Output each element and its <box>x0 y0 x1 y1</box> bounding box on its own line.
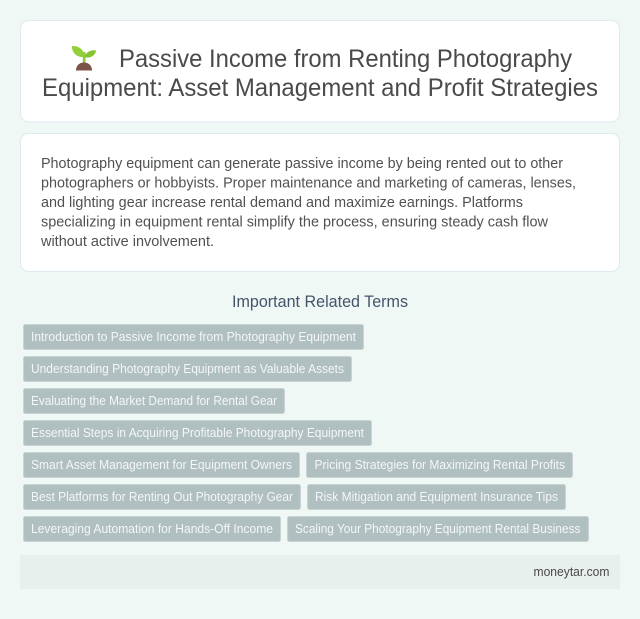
text block: description: without active involvement. <box>40 234 214 250</box>
footer bar <box>20 555 620 589</box>
text block: description: Photography equipment can generate passive income by being rented out to other <box>41 156 563 172</box>
tag: Introduction to Passive Income from Photography Equipment <box>31 330 356 344</box>
tag: Pricing Strategies for Maximizing Rental Profits <box>314 458 565 472</box>
tag <box>24 356 352 382</box>
footer source text: moneytar.com <box>534 565 610 579</box>
tag: Essential Steps in Acquiring Profitable Photography Equipment <box>31 426 364 440</box>
panel: description card <box>20 134 620 272</box>
tag <box>24 452 300 478</box>
tag <box>24 516 280 542</box>
text block: description <box>40 156 576 250</box>
text block: description: and lighting gear increase rental demand and maximize earnings. Platforms <box>41 195 523 211</box>
title: Equipment: Asset Management and Profit Strategies <box>42 74 598 102</box>
tag <box>24 324 364 350</box>
heading: important related terms: Important Related Terms <box>232 293 408 311</box>
tag <box>24 484 300 510</box>
icon: seedling <box>72 46 96 70</box>
tag <box>308 484 566 510</box>
tag: Scaling Your Photography Equipment Rental Business <box>295 522 580 536</box>
tag: Best Platforms for Renting Out Photography Gear <box>31 490 293 504</box>
tag: Smart Asset Management for Equipment Owners <box>31 458 292 472</box>
title <box>42 45 598 102</box>
text block: description: specializing in equipment rental simplify the process, ensuring steady cash flow <box>41 214 549 230</box>
text block: description: photographers or hobbyists. Proper maintenance and marketing of cameras, lenses, <box>41 176 576 192</box>
tag: Understanding Photography Equipment as Valuable Assets <box>31 362 344 376</box>
title: Passive Income from Renting Photography <box>119 45 572 73</box>
tag <box>288 516 588 542</box>
tag: Evaluating the Market Demand for Rental Gear <box>31 394 277 408</box>
panel: title card <box>20 20 620 122</box>
panel: related term tags <box>24 324 588 542</box>
tag <box>24 388 284 414</box>
tag: Risk Mitigation and Equipment Insurance Tips <box>315 490 558 504</box>
tag <box>24 420 372 446</box>
tag: Leveraging Automation for Hands-Off Income <box>31 522 273 536</box>
tag <box>306 452 572 478</box>
